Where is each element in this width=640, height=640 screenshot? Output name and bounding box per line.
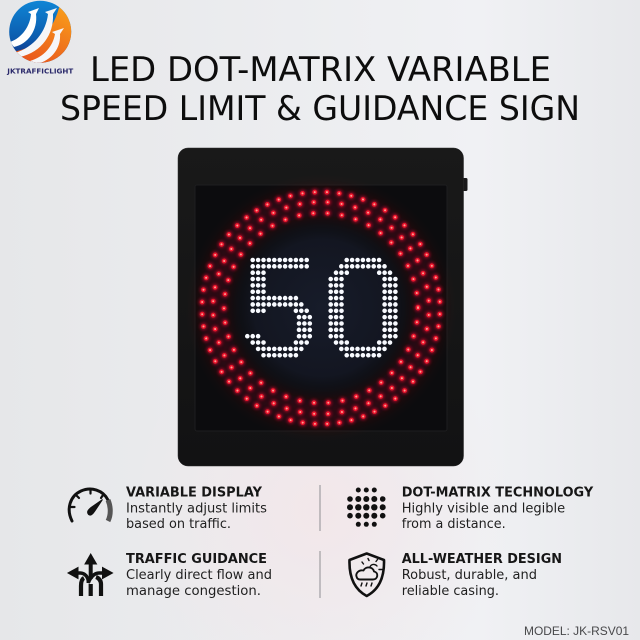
heading: variable display: VARIABLE DISPLAY — [126, 485, 262, 501]
text: traffic guidance description: Clearly direct flow and — [126, 567, 272, 583]
text: dot-matrix description: from a distance. — [402, 516, 506, 532]
feature: variable display — [69, 485, 267, 532]
white LED digits: 50 — [247, 260, 396, 355]
heading: dot-matrix technology: DOT-MATRIX TECHNOLOGY — [402, 485, 593, 501]
divider: bottom row — [320, 551, 321, 598]
heading: all-weather design: ALL-WEATHER DESIGN — [402, 551, 562, 567]
icon: dot grid — [347, 488, 386, 527]
sign housing — [178, 148, 464, 466]
text: variable display description: based on traffic. — [126, 516, 231, 532]
text: dot-matrix description — [402, 501, 565, 532]
text: variable display description — [126, 501, 267, 532]
red LED ring — [202, 192, 440, 424]
feature: dot-matrix technology — [347, 485, 593, 532]
panel glow — [196, 186, 446, 430]
logo mark — [9, 0, 72, 63]
text: all-weather description: Robust, durable, and — [402, 567, 537, 583]
digit 5 — [247, 260, 310, 355]
divider: top row — [320, 485, 321, 531]
side knob — [461, 178, 468, 191]
title — [60, 50, 580, 128]
text: dot-matrix description: Highly visible and legible — [402, 501, 565, 517]
icon: speedometer — [69, 489, 110, 521]
heading: traffic guidance: TRAFFIC GUIDANCE — [126, 551, 267, 567]
text: traffic guidance description: manage congestion. — [126, 583, 261, 599]
model number: MODEL: JK-RSV01 — [524, 624, 629, 638]
logo: JK Traffic Light — [6, 0, 76, 76]
text: all-weather description: reliable casing. — [402, 583, 499, 599]
display panel — [195, 185, 447, 431]
text: variable display description: Instantly adjust limits — [126, 501, 267, 517]
logo wordmark: JKTRAFFICLIGHT — [6, 68, 74, 76]
title: LED DOT-MATRIX VARIABLE — [90, 50, 551, 89]
feature: all-weather design — [349, 551, 562, 599]
text: all-weather description — [402, 567, 537, 599]
icon: weather shield — [349, 554, 384, 596]
text: traffic guidance description — [126, 567, 272, 599]
digit 0 — [331, 260, 396, 355]
LED sign — [178, 148, 468, 466]
feature: traffic guidance — [68, 551, 272, 599]
icon: direction arrows — [68, 554, 112, 596]
title: SPEED LIMIT & GUIDANCE SIGN — [60, 89, 580, 128]
